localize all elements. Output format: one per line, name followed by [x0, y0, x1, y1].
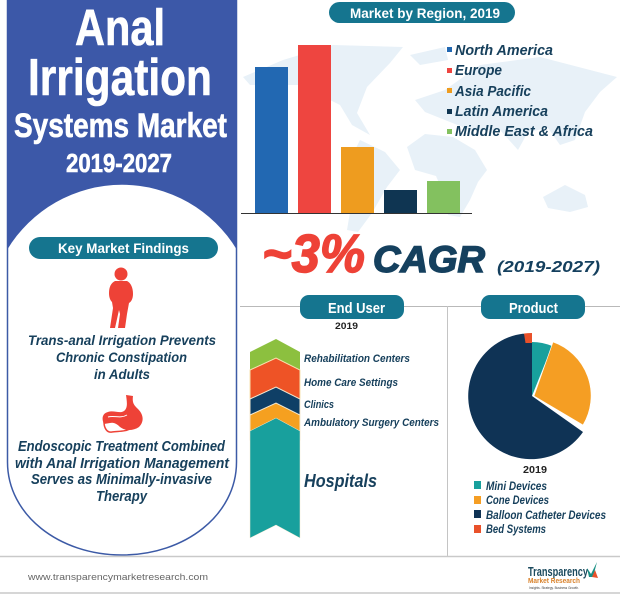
text: endoscopic finding	[15, 439, 230, 505]
legend: product: Mini Devices	[486, 481, 547, 493]
labels: end user: Ambulatory Surgery Centers	[303, 417, 439, 429]
title: Systems Market	[14, 107, 227, 145]
labels: end user: Home Care Settings	[304, 377, 398, 389]
pie chart: product	[468, 333, 591, 459]
text: endoscopic finding: Therapy	[96, 489, 148, 505]
CAGR callout	[262, 224, 600, 284]
legend: product: Bed Systems	[486, 524, 546, 536]
text: trans-anal finding: Trans-anal Irrigation Prevents	[28, 332, 216, 348]
legend: regions: Asia Pacific	[454, 83, 532, 100]
title: 2019-2027	[66, 148, 172, 178]
heading pill: product: Product	[509, 300, 558, 317]
logo: transparency market research	[528, 562, 598, 590]
heading pill: end user	[300, 295, 404, 319]
text: trans-anal finding: Chronic Constipation	[56, 349, 187, 365]
CAGR callout: CAGR	[373, 239, 485, 280]
legend: product	[474, 481, 606, 536]
legend: regions: North America	[455, 42, 553, 59]
heading pill: end user: End User	[328, 300, 385, 317]
logo: transparency market research: Insights. Strategy. Business Growth.	[529, 586, 579, 590]
icon: stomach	[103, 395, 143, 432]
text: endoscopic finding: Serves as Minimally-invasive	[31, 472, 212, 488]
labels: end user: Hospitals	[304, 471, 377, 491]
text: endoscopic finding: Endoscopic Treatment Combined	[18, 439, 226, 455]
legend: regions: Europe	[455, 62, 502, 79]
text: trans-anal finding	[28, 332, 216, 382]
legend: regions	[447, 42, 593, 140]
ribbon chart: end user	[250, 339, 300, 538]
heading pill: market by region	[329, 2, 515, 23]
heading pill: market by region: Market by Region, 2019	[350, 5, 500, 21]
legend: product: Cone Devices	[486, 495, 549, 507]
legend: regions: Middle East & Africa	[455, 123, 593, 140]
title: Anal	[75, 0, 165, 56]
labels: end user: Rehabilitation Centers	[304, 353, 410, 365]
text: endoscopic finding: with Anal Irrigation Management	[15, 456, 230, 472]
CAGR callout: (2019-2027)	[497, 259, 600, 276]
title: Irrigation	[28, 49, 212, 107]
labels: end user: Clinics	[304, 399, 334, 411]
background world map	[243, 45, 617, 232]
panel: left title and findings	[7, 0, 237, 555]
title	[14, 0, 227, 178]
year label: product: 2019	[523, 464, 547, 476]
website url: www.transparencymarketresearch.com	[27, 572, 208, 583]
heading pill: key market findings: Key Market Findings	[58, 240, 189, 256]
text: trans-anal finding: in Adults	[94, 366, 150, 382]
heading pill: key market findings	[29, 237, 218, 259]
heading pill: product	[481, 295, 585, 319]
icon: person with abdominal pain	[109, 268, 133, 328]
labels: end user	[303, 353, 439, 491]
legend: regions: Latin America	[455, 103, 548, 120]
logo: transparency market research: Market Research	[528, 578, 580, 585]
logo: transparency market research: Transparency	[528, 564, 589, 579]
year label: end user: 2019	[335, 321, 358, 332]
bar chart: market by region	[241, 45, 472, 214]
CAGR callout: ~3%	[262, 224, 365, 284]
